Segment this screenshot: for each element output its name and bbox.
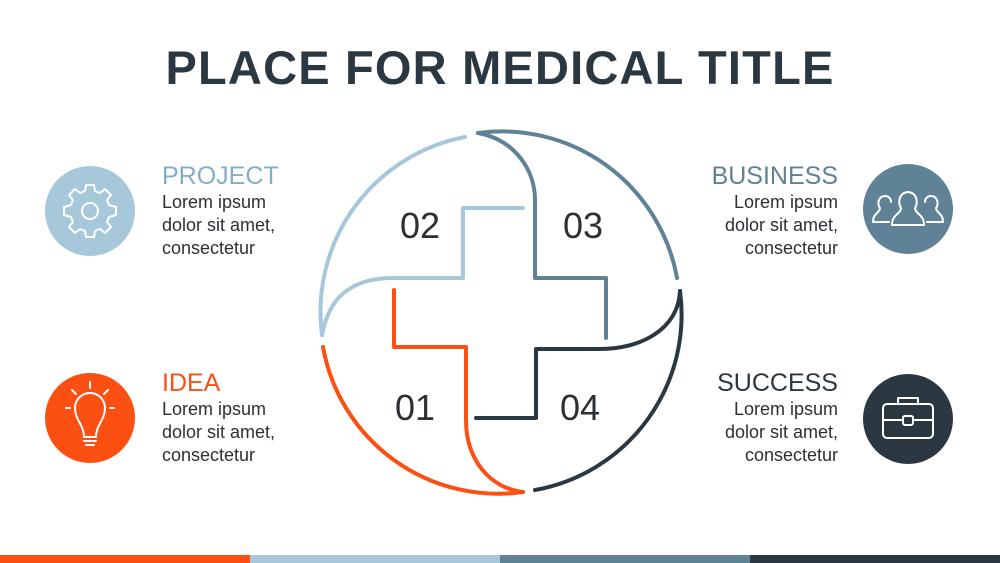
segment 01 orange: [323, 290, 523, 494]
numbers: [395, 205, 603, 428]
numbers: 03: [563, 205, 603, 246]
text: idea: dolor sit amet,: [162, 422, 275, 442]
text: idea: [162, 369, 275, 465]
bottom color bar: [0, 555, 1000, 563]
text: idea: IDEA: [162, 369, 220, 397]
text: project: dolor sit amet,: [162, 215, 275, 235]
text: project: consectetur: [162, 238, 255, 258]
text: project: Lorem ipsum: [162, 192, 266, 212]
segment 02 light blue: [320, 137, 523, 335]
icon: bulb: [45, 373, 135, 463]
text: success: SUCCESS: [717, 369, 838, 397]
text: business: BUSINESS: [712, 162, 838, 190]
text: success: dolor sit amet,: [725, 422, 838, 442]
segment 04 dark: [476, 291, 682, 490]
segment 03 steel: [478, 131, 677, 338]
numbers: 01: [395, 387, 435, 428]
text: project: PROJECT: [162, 162, 279, 190]
numbers: 04: [560, 387, 600, 428]
text: success: Lorem ipsum: [734, 399, 838, 419]
text: business: [712, 162, 838, 258]
numbers: 02: [400, 205, 440, 246]
text: idea: consectetur: [162, 445, 255, 465]
text: project: [162, 162, 279, 258]
text: success: consectetur: [745, 445, 838, 465]
icon: people: [863, 164, 953, 254]
text: idea: Lorem ipsum: [162, 399, 266, 419]
icon: gear: [45, 166, 135, 256]
text: business: Lorem ipsum: [734, 192, 838, 212]
title: PLACE FOR MEDICAL TITLE: [165, 41, 835, 94]
text: success: [717, 369, 838, 465]
icon: briefcase: [863, 374, 953, 464]
text: business: consectetur: [745, 238, 838, 258]
text: business: dolor sit amet,: [725, 215, 838, 235]
